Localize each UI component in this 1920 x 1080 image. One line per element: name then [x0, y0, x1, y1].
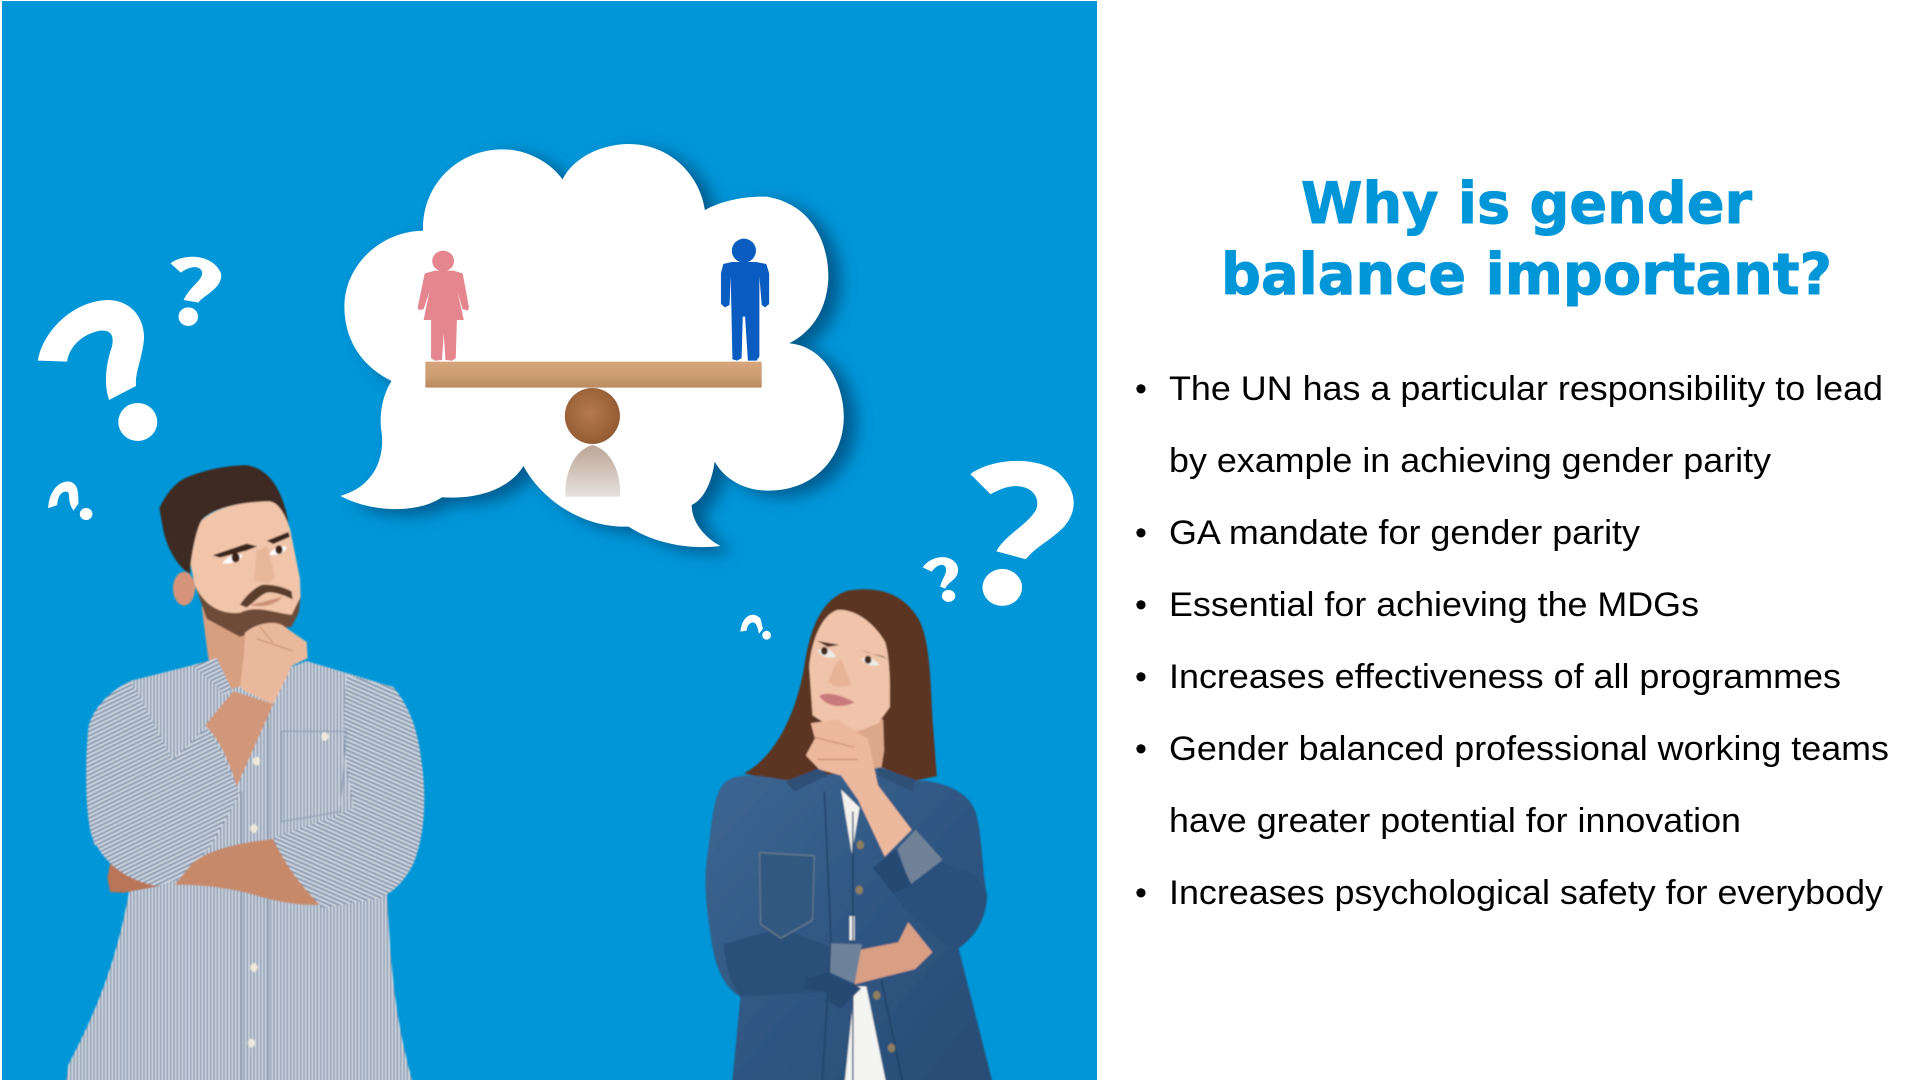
jacket pocket — [760, 853, 814, 938]
man's left sleeve — [86, 681, 240, 886]
woman's left sleeve fold — [724, 928, 829, 996]
lips — [819, 694, 855, 706]
shirt buttons — [248, 732, 328, 1047]
bullet 3: • — [1135, 586, 1147, 624]
lower wrist and hand — [855, 922, 932, 984]
cloud shape — [340, 144, 844, 547]
wooden plank — [425, 362, 762, 388]
jacket placket — [821, 792, 907, 1080]
small question mark — [923, 557, 958, 602]
bullet list — [1135, 370, 1889, 912]
woman's right forearm sleeve — [895, 862, 987, 948]
white shirt upper — [841, 790, 860, 854]
pocket — [282, 731, 347, 822]
woman thinking — [705, 589, 997, 1080]
bullet 1: • — [1135, 370, 1147, 408]
jacket — [705, 767, 997, 1080]
wooden ball — [565, 388, 620, 444]
bullet 1 — [1135, 370, 1883, 480]
bullet 3: Essential for achieving the MDGs — [1169, 586, 1699, 624]
lower cuff — [830, 943, 862, 984]
eyebrows — [817, 641, 888, 659]
man thinking — [63, 465, 424, 1080]
white shirt lower — [843, 916, 890, 1080]
front hair strand — [881, 623, 915, 775]
upper forearm and hand — [806, 719, 912, 857]
eyebrows — [213, 532, 290, 558]
bullet 4: Increases effectiveness of all programmes — [1169, 658, 1841, 696]
hair — [744, 589, 937, 788]
left eye — [818, 647, 836, 658]
ball reflection — [565, 445, 620, 497]
large question mark — [970, 461, 1074, 606]
large question mark — [38, 300, 157, 441]
ear — [173, 572, 195, 605]
bullet 1: The UN has a particular responsibility to lead — [1169, 370, 1883, 408]
question marks right — [740, 461, 1074, 640]
jacket collar — [786, 767, 915, 792]
face — [191, 501, 301, 637]
title — [1221, 171, 1832, 308]
neck — [202, 607, 260, 699]
beard — [195, 585, 301, 637]
bullet 5: Gender balanced professional working teams — [1169, 730, 1889, 768]
shirt torso — [63, 876, 418, 1080]
placket lines — [242, 711, 268, 1080]
collar — [193, 658, 232, 695]
upper cuff band — [873, 850, 912, 894]
panel: blue background — [2, 1, 1097, 1080]
pink female figure — [418, 251, 469, 361]
raised forearm — [205, 691, 273, 787]
neck — [841, 719, 885, 775]
bullet 6: Increases psychological safety for everybody — [1169, 874, 1883, 912]
bullet 2: • — [1135, 514, 1147, 552]
bullet 6: • — [1135, 874, 1147, 912]
crossed forearm — [175, 839, 320, 905]
tiny question mark — [740, 615, 771, 640]
face — [809, 610, 890, 731]
fist on chin — [240, 623, 308, 704]
hair — [159, 465, 289, 574]
upper cuff — [898, 830, 943, 885]
left eye — [223, 553, 243, 564]
title: balance important? — [1221, 242, 1832, 308]
right eye — [269, 545, 287, 555]
bullet 5: • — [1135, 730, 1147, 768]
title: Why is gender — [1301, 171, 1752, 237]
right eye — [861, 656, 880, 666]
bullet 5: have greater potential for innovation — [1169, 802, 1741, 840]
bullet 5 — [1135, 730, 1889, 840]
question marks left — [38, 257, 221, 520]
tiny question mark — [48, 481, 92, 520]
finger creases — [257, 627, 293, 651]
thought cloud with balance scale — [340, 144, 856, 553]
cloud shadow — [353, 150, 856, 553]
moustache — [240, 585, 293, 608]
finger creases — [814, 737, 858, 759]
man's right sleeve — [273, 675, 424, 908]
lower cuff band — [804, 972, 861, 1009]
nose — [828, 659, 851, 687]
bullet 2: GA mandate for gender parity — [1169, 514, 1640, 552]
jacket buttons — [856, 841, 895, 1052]
man's far hand — [107, 864, 160, 893]
shirt upper body and sleeves — [88, 659, 424, 908]
mouth — [251, 597, 283, 606]
small question mark — [170, 257, 221, 326]
blue male figure — [721, 239, 769, 361]
bullet 4: • — [1135, 658, 1147, 696]
bullet 1: by example in achieving gender parity — [1169, 442, 1771, 480]
nose — [254, 546, 275, 583]
